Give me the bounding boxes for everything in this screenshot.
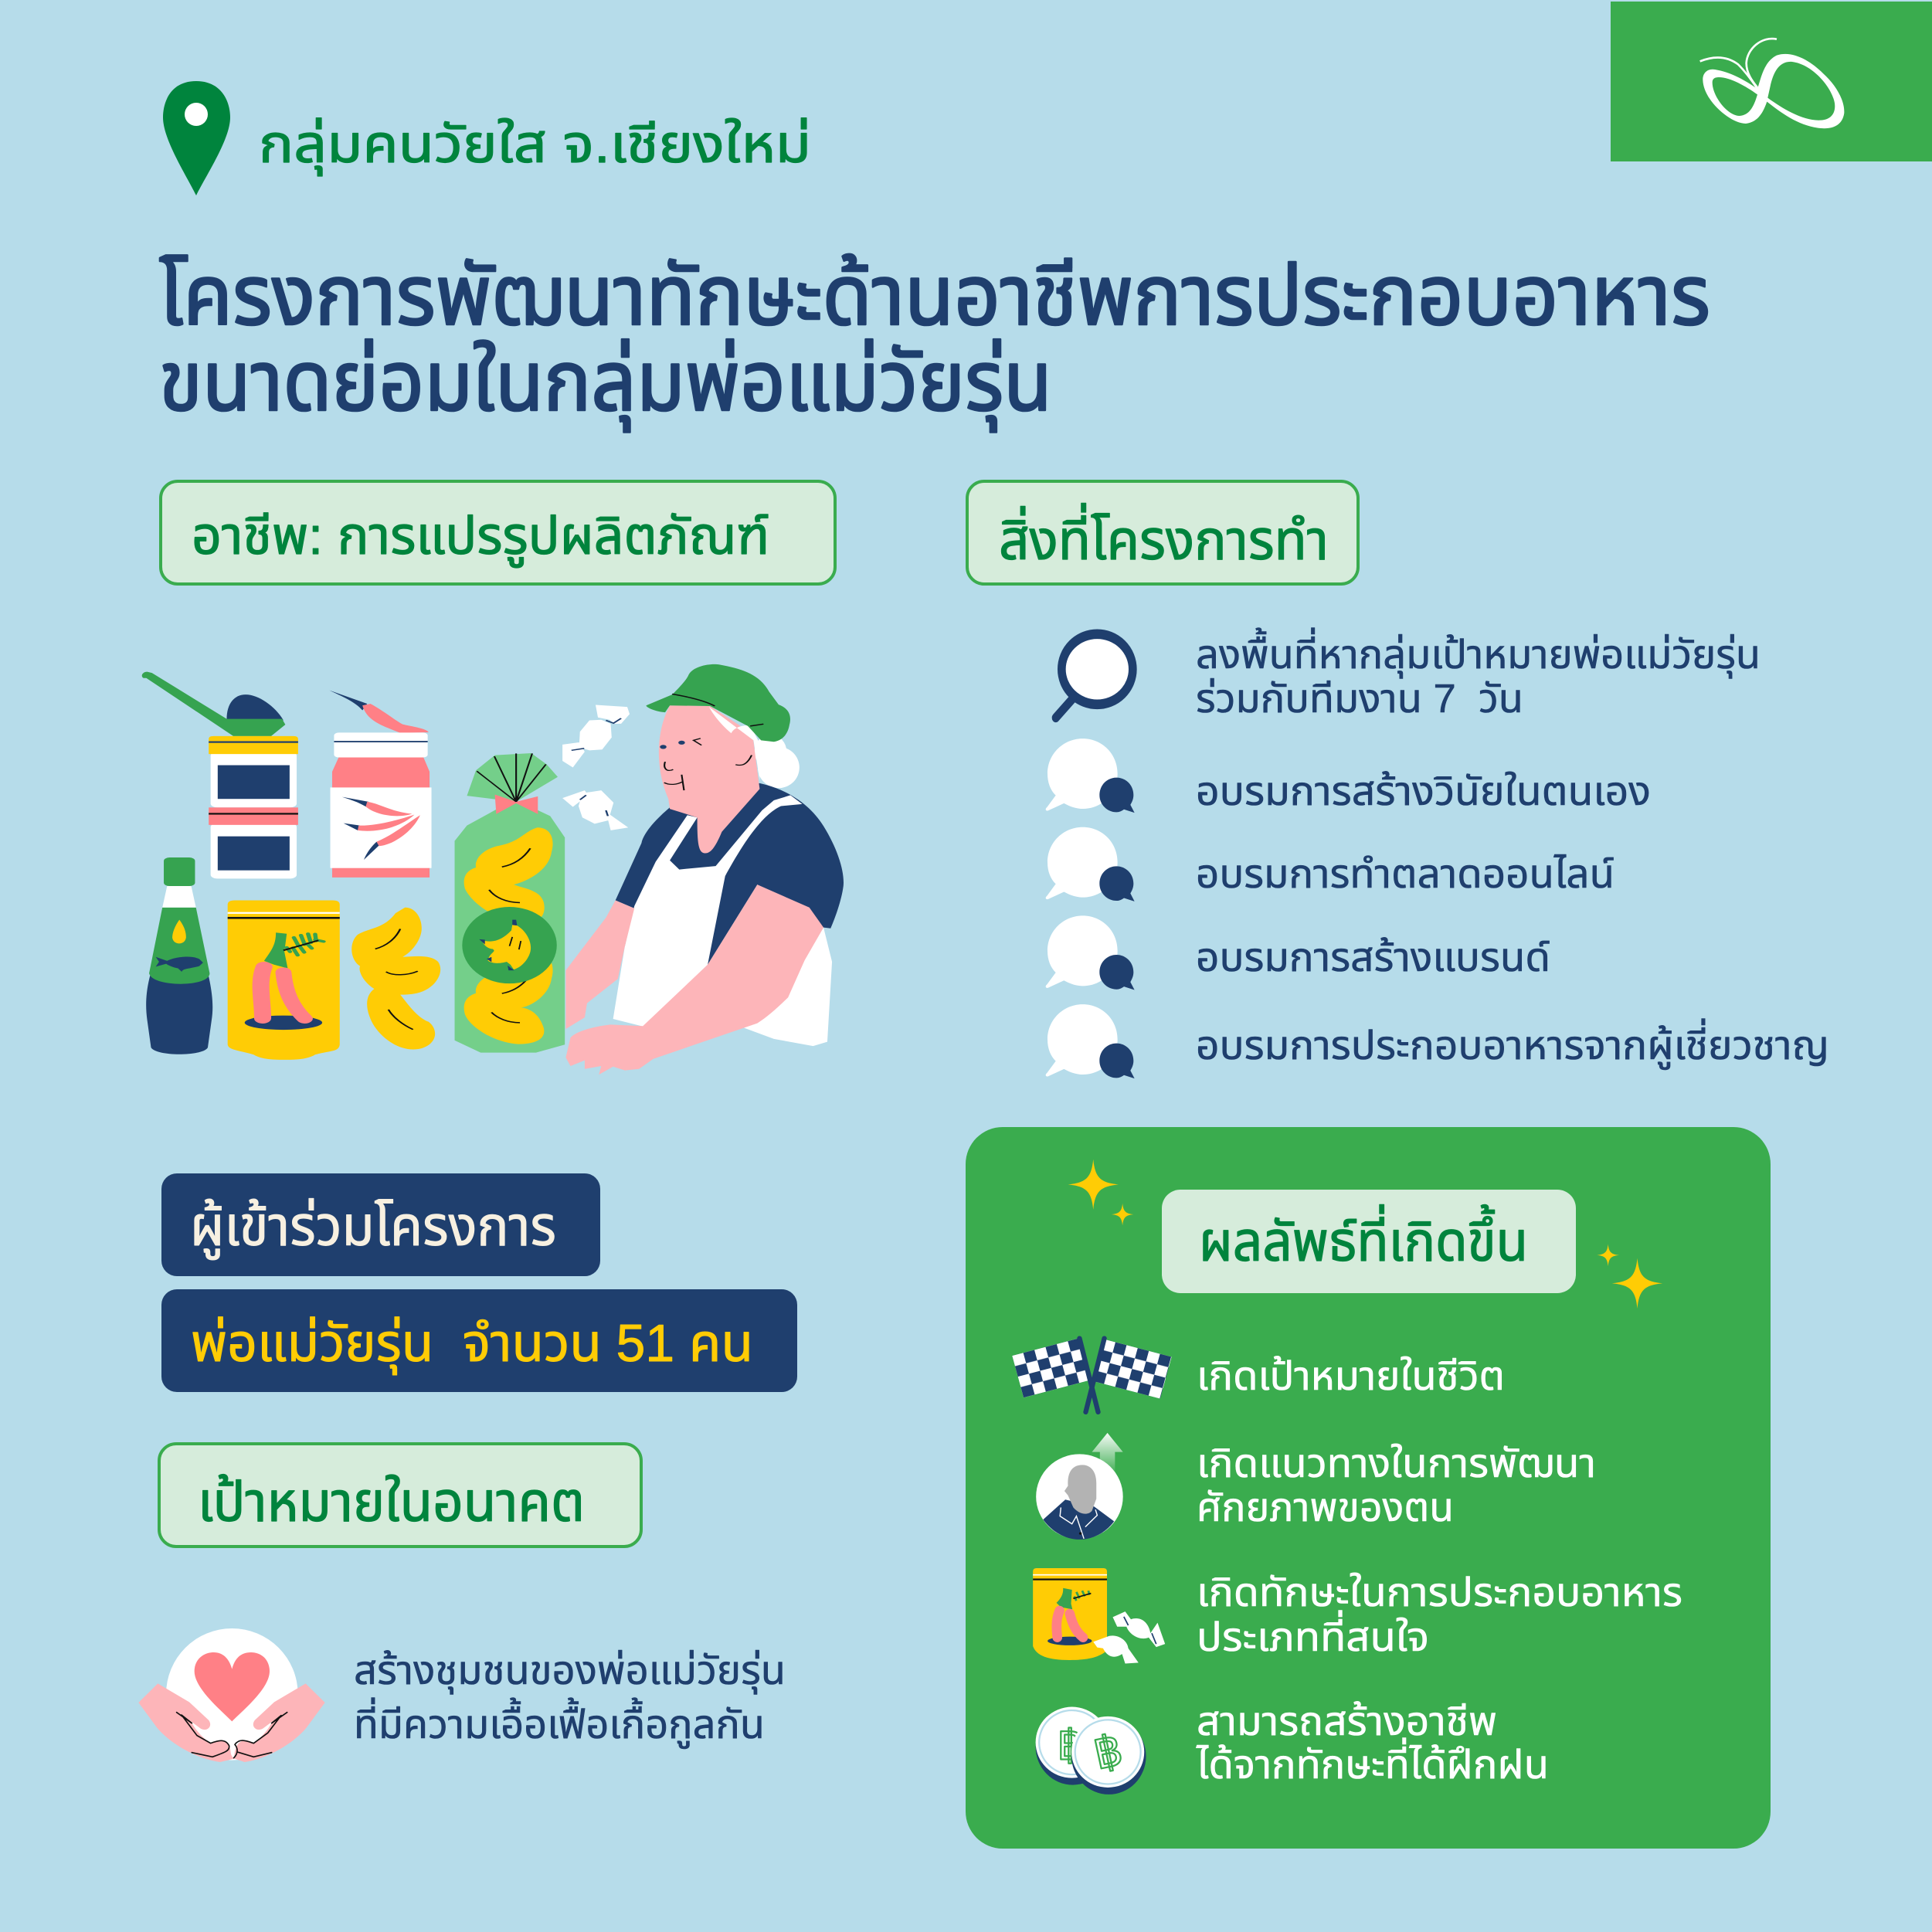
icon: butterfly infinity logo xyxy=(1700,39,1844,128)
results heading box xyxy=(1162,1190,1576,1293)
icon: speech bubbles 4 xyxy=(1046,1004,1135,1078)
icon: checkered flags xyxy=(1012,1338,1172,1412)
results text list: เกิดทักษะในการประกอบอาหาร xyxy=(1197,1570,1682,1615)
activities text list xyxy=(1196,627,1829,1070)
location heading: กลุ่มคนวัยใส จ.เชียงใหม่ xyxy=(259,115,811,176)
icon: coins: ฿ xyxy=(1058,1723,1083,1771)
icons: activities list xyxy=(1046,634,1135,1078)
activities text list: อบรมการสร้างแบรนด์ xyxy=(1196,935,1550,980)
results icons xyxy=(1012,1160,1662,1794)
participants heading box xyxy=(161,1173,600,1276)
participants count box xyxy=(161,1289,797,1392)
jars stacked xyxy=(209,736,298,878)
icon: person with growth arrow xyxy=(1036,1433,1123,1540)
vendor woman xyxy=(565,664,844,1075)
activities text list: ลงพื้นที่หากลุ่มเป้าหมายพ่อแม่วัยรุ่น xyxy=(1196,627,1761,679)
fish sauce bottle xyxy=(146,857,212,1054)
results text list: ประเภทที่สนใจ xyxy=(1197,1610,1429,1660)
icon: spoon xyxy=(142,672,285,736)
icon: snack bag and candies xyxy=(1033,1568,1165,1663)
icon: candy bottom xyxy=(562,790,628,830)
panel: results xyxy=(966,1127,1771,1849)
results text list: ศักยภาพของตน xyxy=(1197,1486,1454,1530)
title xyxy=(159,249,1710,432)
icon: speech bubbles 3 xyxy=(1046,915,1135,990)
results text list: เกิดแนวทางในการพัฒนา xyxy=(1197,1441,1596,1486)
title: ขนาดย่อมในกลุ่มพ่อแม่วัยรุ่น xyxy=(159,334,1052,432)
community goal text xyxy=(354,1648,786,1749)
logo panel xyxy=(1611,2,1932,161)
illustration: food products and vendor xyxy=(142,664,844,1075)
icon: coins: ฿ xyxy=(1089,1725,1127,1781)
community goal text: สร้างชุมชนของพ่อแม่วัยรุ่น xyxy=(354,1648,786,1695)
results heading box: ผลลัพธ์ที่เกิดขึ้น xyxy=(1199,1204,1528,1273)
heading box: what the project does: สิ่งที่โครงการทำ xyxy=(999,503,1329,572)
icon: candy top xyxy=(562,705,630,768)
results text list: เกิดเป้าหมายในชีวิต xyxy=(1197,1354,1505,1399)
results text list xyxy=(1196,1354,1682,1788)
icon: coins xyxy=(1036,1707,1146,1794)
icon: location pin xyxy=(163,81,230,195)
activities text list: อบรมการทำตลาดออนไลน์ xyxy=(1196,852,1615,897)
participants count box: พ่อแม่วัยรุ่น จำนวน 51 คน xyxy=(191,1314,753,1375)
community goal text: ที่มีความเอื้อเฟื้อเกื้อกูลกัน xyxy=(354,1697,765,1749)
chili jar xyxy=(329,691,432,878)
icon: magnifying glass xyxy=(1056,634,1132,718)
tamarind snack bag xyxy=(228,901,340,1060)
activities text list: ร่วมกับทีมงาน 7 วัน xyxy=(1196,677,1523,722)
icon: speech bubbles 2 xyxy=(1046,827,1135,901)
activities text list: อบรมการสร้างวินัยในตนเอง xyxy=(1196,769,1651,814)
heading box: what the project does xyxy=(967,481,1358,584)
future goal heading box xyxy=(159,1444,641,1547)
icon: speech bubbles 1 xyxy=(1046,739,1135,813)
results text list: ได้จากทักษะที่ได้ฝึกฝน xyxy=(1196,1737,1549,1788)
results text list: สามารถสร้างอาชีพ xyxy=(1197,1699,1497,1744)
icon: heart in hands xyxy=(138,1628,325,1762)
loose banana chips xyxy=(351,908,440,1049)
occupation label box xyxy=(161,481,835,584)
banana chip bag xyxy=(455,753,565,1053)
activities text list: อบรมการประกอบอาหารจากผู้เชี่ยวชาญ xyxy=(1196,1018,1829,1070)
icon: sparkles xyxy=(1068,1160,1662,1309)
occupation label box: อาชีพ: การแปรรูปผลิตภัณฑ์ xyxy=(192,507,769,568)
title: โครงการพัฒนาทักษะด้านอาชีพการประกอบอาหาร xyxy=(159,249,1710,342)
participants heading box: ผู้เข้าร่วมโครงการ xyxy=(190,1196,556,1260)
future goal heading box: เป้าหมายในอนาคต xyxy=(198,1472,585,1533)
